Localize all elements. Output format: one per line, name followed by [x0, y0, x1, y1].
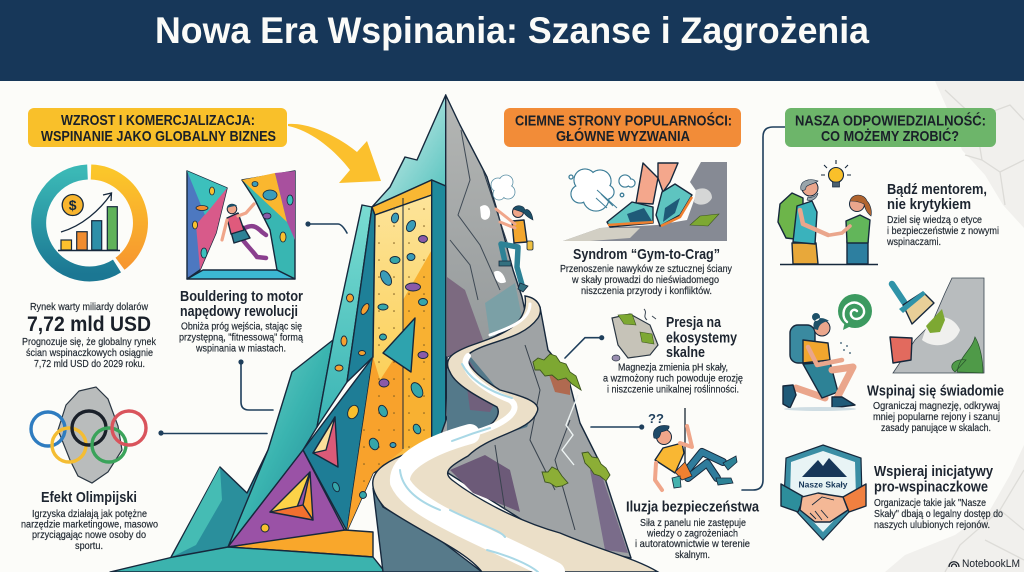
dust lines [644, 309, 656, 320]
text: ecosystem pressure: skalne [666, 344, 705, 361]
text: safety illusion: wiedzy o zagrożeniach [646, 528, 738, 540]
hair [653, 426, 669, 439]
light aqua face [317, 205, 372, 427]
cloud outline [569, 169, 635, 211]
brush ferrule [899, 291, 926, 313]
badge name: Nasze Skały [798, 480, 848, 490]
wind lines [596, 190, 617, 208]
woman hair [850, 195, 871, 216]
rock cracks lower [495, 345, 575, 530]
text: support initiatives: naszych ulubionych rejonów. [874, 519, 990, 531]
man torso [793, 201, 817, 244]
panel: challenges heading: GŁÓWNE WYZWANIA [556, 127, 690, 145]
text: safety illusion [626, 498, 760, 561]
text: be a mentor: i bezpieczeństwie z nowymi [887, 225, 999, 237]
text: bouldering: napędowy rewolucji [180, 303, 298, 320]
yellow small hold [261, 524, 269, 532]
text: climb consciously: Ograniczaj magnezję, odkrywaj [873, 400, 1000, 412]
text: market size: 7,72 mld USD do 2029 roku. [34, 358, 145, 370]
torso [803, 340, 830, 363]
icon: gym-to-crag shoes [563, 162, 727, 241]
rear leg fill [685, 452, 723, 473]
question marks: ?? [648, 411, 664, 426]
text: safety illusion: Iluzja bezpieczeństwa [626, 498, 760, 516]
front leg [832, 367, 853, 398]
harness [675, 462, 692, 480]
text: safety illusion: skalnym. [675, 549, 710, 561]
man head [802, 180, 818, 196]
rock white smear [922, 317, 960, 345]
connector: bouldering text to wall [238, 359, 273, 410]
text: support initiatives [874, 463, 1003, 531]
rope [483, 170, 508, 245]
panel: responsibility heading: CO MOŻEMY ZROBIĆ? [821, 127, 959, 145]
chalk marks on rock [480, 205, 506, 283]
text: gym to crag: niszczenia przyrody i konfliktów. [581, 285, 712, 297]
icon: market donut chart: $ [69, 197, 77, 213]
hair [227, 204, 237, 208]
arm [808, 347, 842, 365]
icon: olympic rings on rock [31, 387, 146, 483]
small teal peak [170, 420, 292, 559]
moss [690, 214, 719, 226]
text: gym to crag: w skały prowadzi do nieświadomego [571, 274, 719, 286]
header banner [0, 0, 1024, 81]
rear shoe [783, 385, 796, 408]
climber [222, 204, 266, 258]
left wall teal facet [187, 171, 227, 215]
text: ecosystem pressure: Presja na [666, 314, 722, 331]
man legs [792, 243, 818, 264]
head [227, 204, 237, 214]
text: olympic effect: narzędzie marketingowe, masowo [21, 518, 158, 530]
icon: market donut chart [39, 172, 140, 274]
text: be a mentor: wspinaczami. [886, 236, 941, 248]
rock teal shading [485, 283, 522, 338]
ground line [780, 264, 878, 266]
icon: conscious climbing [783, 278, 984, 411]
backpack [778, 193, 803, 240]
rock ground highlight [563, 228, 640, 241]
text: ecosystem pressure: ekosystemy [666, 330, 738, 346]
text: bouldering [179, 288, 303, 354]
rock crack lightning [562, 395, 578, 465]
text: bouldering: wspinania w miastach. [195, 342, 286, 354]
yellow wall top band [372, 180, 432, 215]
text: market size: Prognozuje się, że globalny rynek [22, 336, 157, 348]
moss [618, 314, 654, 344]
left shoe [607, 202, 653, 227]
legs [636, 163, 678, 204]
pink pyramid hold [313, 417, 338, 467]
legs [240, 226, 266, 258]
plant [952, 337, 983, 373]
shoe dark panels [627, 198, 680, 222]
woman head [850, 196, 864, 212]
fingers [810, 497, 834, 520]
torso [227, 213, 244, 234]
brush handle [892, 284, 904, 302]
rock cracks [450, 130, 500, 300]
legs [501, 244, 522, 285]
head [814, 320, 830, 336]
moss patch lower [542, 467, 568, 487]
text: gym to crag [560, 246, 733, 297]
climber on rock [483, 170, 533, 292]
text: climb consciously [867, 382, 1004, 434]
wall holds [331, 212, 428, 498]
trail upper highlight [490, 304, 530, 335]
text: gym to crag: Przenoszenie nawyków ze sztucznej ściany [560, 263, 733, 275]
shield [784, 445, 862, 540]
panel: responsibility heading: NASZA ODPOWIEDZIALNOŚĆ: [795, 112, 986, 130]
text: safety illusion: i autoratownictwie w terenie [635, 538, 750, 550]
connector: olympic effect to wall [158, 430, 267, 436]
title: Nowa Era Wspinania: Szanse i Zagrożenia [155, 10, 869, 51]
marble texture bottom right [885, 445, 1024, 572]
chalk cloud [491, 175, 515, 200]
marble texture top right [935, 81, 1024, 228]
text: climb consciously: mniej popularne rejony i szanuj [873, 411, 1000, 423]
torso [655, 443, 684, 473]
text: olympic effect: Efekt Olimpijski [41, 489, 137, 506]
woman legs [847, 241, 868, 264]
trail white stream [466, 356, 515, 432]
moss patch with erosion [533, 354, 581, 395]
rock [58, 387, 122, 483]
icon: bouldering wall [187, 171, 295, 279]
illustration: climbing mountain [110, 95, 658, 572]
orange wall overlay right [403, 250, 432, 448]
baseline [58, 250, 120, 252]
text: safety illusion: Siła z panelu nie zastępuje [640, 517, 746, 529]
backpack [790, 325, 815, 363]
text: be a mentor [886, 181, 999, 248]
hair [513, 206, 533, 220]
purple triangle panel [228, 450, 345, 547]
torso [512, 220, 527, 243]
dark teal triangle [303, 357, 373, 531]
ice peak [372, 95, 446, 207]
text: gym to crag: Syndrom “Gym-to-Crag” [573, 246, 720, 263]
pebble [612, 355, 620, 361]
text: ecosystem pressure [603, 314, 743, 396]
text: support initiatives: Skały" dbają o legalny dostęp do [874, 508, 1003, 520]
rock [893, 278, 984, 373]
man hair and beard [801, 180, 818, 201]
chalk bag [890, 337, 912, 363]
gray upper rock [446, 95, 528, 433]
text: bouldering: Obniża próg wejścia, stając się [181, 320, 302, 332]
front shoe [832, 397, 855, 408]
wall dots [347, 195, 432, 531]
panel: growth heading: WSPINANIE JAKO GLOBALNY BIZNES [41, 128, 276, 145]
panel: responsibility heading [785, 108, 996, 147]
orange wall overlay left [347, 345, 403, 531]
shield inner [790, 451, 856, 532]
chalk dust [840, 343, 851, 353]
text: bouldering: Bouldering to motor [180, 288, 303, 305]
logo: NotebookLM: NotebookLM [962, 558, 1020, 570]
cloud fill [572, 170, 634, 210]
trail wide white stream [400, 434, 555, 572]
floor [187, 270, 295, 279]
hair bun [812, 313, 829, 330]
rear shin [796, 388, 825, 398]
right gray rock [440, 307, 631, 558]
text: support initiatives: Organizacje takie jak "Nasze [874, 497, 986, 509]
woman arm [830, 226, 850, 235]
connector: safety illusion to rock [591, 424, 644, 430]
dollar coin [62, 194, 83, 216]
rock chalk [694, 188, 712, 205]
bottom yellow band [228, 530, 373, 557]
dark teal strip [347, 207, 375, 382]
icon: hanging climber [648, 408, 737, 490]
woman torso [846, 215, 870, 243]
connector: ecosystem pressure to moss [565, 335, 604, 358]
icon: damaged rock [612, 309, 658, 361]
wall centre seam [402, 198, 404, 449]
text: be a mentor: Bądź mentorem, [887, 181, 987, 198]
right shoe [656, 184, 692, 226]
right rock purple shading [590, 470, 628, 553]
rock [563, 162, 727, 241]
panel: growth heading [28, 108, 287, 147]
panel: growth heading: WZROST I KOMERCJALIZACJA: [61, 112, 255, 129]
lower arm [655, 463, 662, 490]
right wall purple facet [275, 171, 295, 240]
right sleeve [843, 484, 866, 512]
text: market size: 7,72 mld USD [27, 313, 151, 336]
text: olympic effect: przyciągając nowe osoby do [32, 529, 146, 541]
text: be a mentor: nie krytykiem [887, 196, 971, 213]
teal wall side strip [432, 180, 446, 445]
icon: mentor handshake [778, 160, 878, 264]
chalk cloud fill [492, 176, 514, 199]
icon: nasze skaly badge [781, 445, 866, 540]
moss patch right [582, 452, 610, 481]
rear leg [685, 452, 723, 473]
arrow: growth into mountain [288, 124, 381, 183]
big teal triangle hold [383, 318, 415, 372]
left wall pink facet [196, 188, 227, 270]
moss on rock [926, 309, 945, 333]
shoes [716, 456, 737, 485]
ground shadow [784, 407, 856, 411]
rope [684, 408, 686, 465]
text: olympic effect [21, 489, 158, 552]
chalk bag [672, 476, 681, 488]
growth arrow [61, 193, 112, 232]
teal base [110, 547, 385, 572]
text: olympic effect: Igrzyska działają jak potężne [32, 508, 147, 520]
text: olympic effect: sportu. [75, 540, 103, 552]
chalk bag [527, 241, 533, 250]
text: support initiatives: Wspieraj inicjatywy [874, 463, 994, 480]
donut [91, 172, 140, 264]
panel: challenges heading [504, 108, 741, 147]
brush head [903, 292, 934, 324]
text: market size [22, 301, 157, 370]
text: bouldering: przystępną, "fitnessową" formą [179, 332, 303, 344]
mountain [802, 458, 847, 477]
arms [496, 209, 515, 228]
small peak light facet [172, 467, 222, 557]
text: be a mentor: Dziel się wiedzą o etyce [887, 214, 982, 226]
text: market size: ścian wspinaczkowych osiągnie [26, 347, 153, 359]
holds [192, 182, 293, 258]
shorts [231, 226, 250, 243]
lower rock purple shading [450, 455, 520, 512]
shorts [803, 362, 838, 398]
soles [608, 197, 692, 226]
text: climb consciously: zasady panujące w skalach. [881, 422, 991, 434]
text: support initiatives: pro-wspinaczkowe [874, 478, 988, 496]
rock purple shading [447, 277, 483, 357]
right wall [242, 171, 295, 279]
man arm [800, 210, 828, 235]
text: ecosystem pressure: a wzmożony ruch powoduje erozję [603, 372, 743, 384]
left sleeve [781, 484, 804, 512]
left wall [187, 171, 227, 279]
connector: bouldering to wall top [305, 221, 347, 233]
trail blue lines [400, 364, 538, 572]
trail [373, 296, 658, 572]
text: ecosystem pressure: Magnezja zmienia pH skały, [618, 362, 728, 374]
head [656, 430, 672, 444]
head and ponytail [512, 206, 524, 218]
large teal slope [228, 340, 333, 547]
text: ecosystem pressure: i niszczenie unikalnej roślinności. [607, 384, 739, 396]
bars [61, 207, 117, 250]
yellow wall panel [347, 195, 432, 531]
rings [31, 411, 146, 462]
light bulb [821, 160, 851, 187]
orange pyramid hold [270, 472, 313, 520]
arms [222, 204, 254, 240]
handshake [800, 493, 848, 522]
right wall yellow facet [242, 173, 287, 222]
text: market size: Rynek warty miliardy dolarów [30, 301, 148, 313]
middle rock between trail [447, 356, 536, 440]
front leg fill [688, 463, 717, 478]
panel: challenges heading: CIEMNE STRONY POPULARNOŚCI: [515, 112, 732, 130]
feet [499, 261, 528, 292]
middle rock purple [466, 360, 500, 412]
front leg [688, 463, 717, 478]
raised arm [680, 426, 692, 447]
green swirl bubble [838, 294, 872, 330]
bracket connector: responsibility column [742, 127, 785, 490]
bottom rock [373, 488, 482, 572]
